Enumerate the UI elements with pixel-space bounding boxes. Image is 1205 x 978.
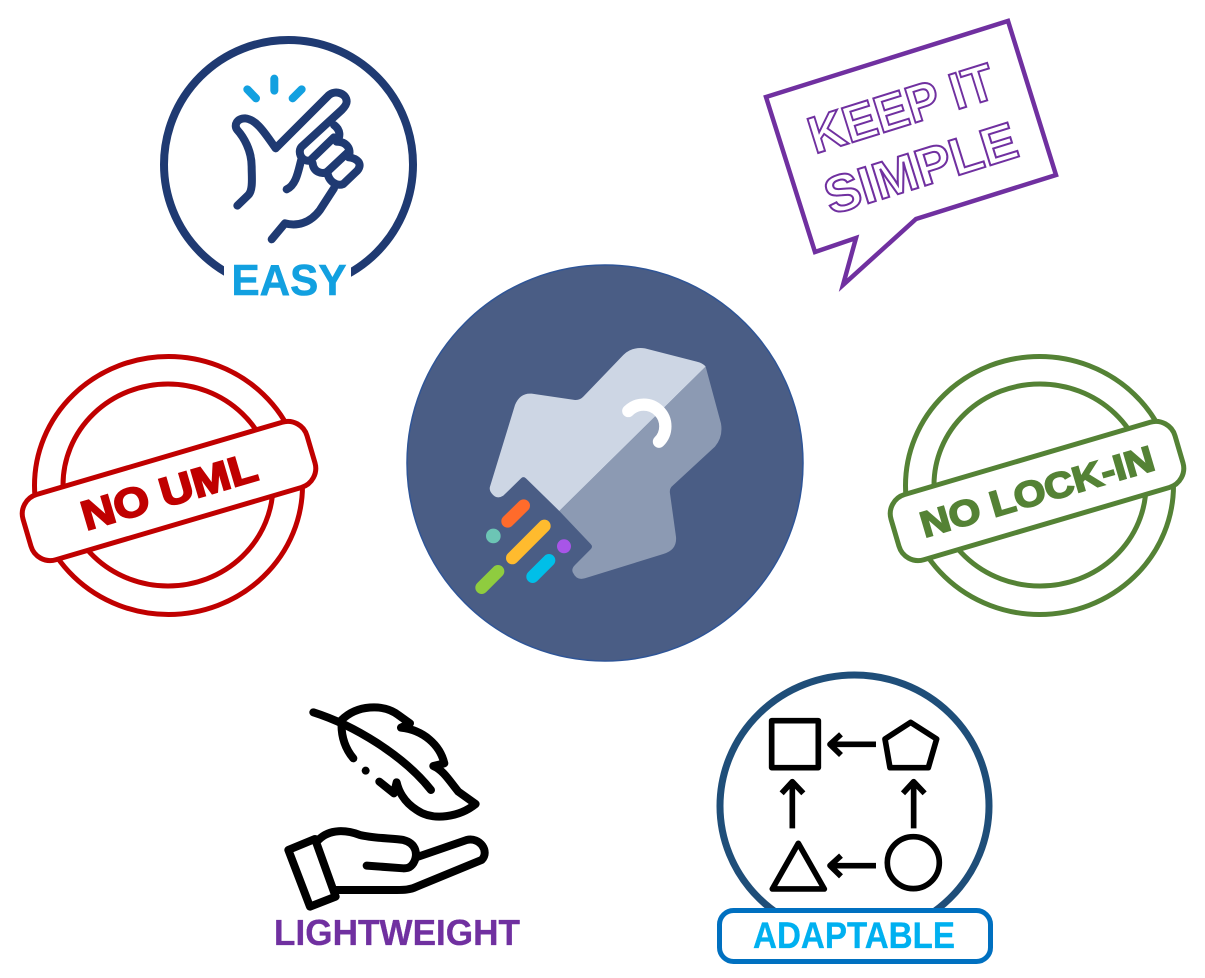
speech bubble outline: [766, 21, 1056, 285]
lightweight label: LIGHTWEIGHT: [274, 912, 520, 953]
outer ring: [34, 356, 302, 614]
panel: lightweight: [274, 707, 520, 953]
keep it text: KEEP IT: [801, 53, 1002, 165]
panel: adaptable: [720, 675, 990, 962]
icon: rocket: [482, 348, 721, 588]
easy label: EASY: [232, 256, 346, 305]
easy label backing: [224, 255, 351, 300]
banner with label: [17, 417, 321, 565]
logo disc: [407, 265, 803, 661]
icon: feather over hand: [288, 707, 485, 907]
banner with label: [885, 417, 1189, 565]
adaptable label: ADAPTABLE: [753, 915, 955, 956]
icon: finger snap hand: [236, 79, 360, 239]
adaptable ring: [720, 675, 989, 937]
easy ring: [164, 40, 413, 289]
panel: keep it simple speech bubble: [766, 21, 1056, 285]
simple text: SIMPLE: [817, 112, 1025, 226]
inner ring: [934, 384, 1146, 586]
panel: no uml stamp: [17, 356, 321, 614]
panel: central rocket logo: [407, 265, 803, 661]
banner with label: NO UML: [76, 444, 262, 539]
icon: shapes cycle: [772, 721, 939, 889]
panel: easy badge: [164, 40, 413, 305]
banner with label: NO LOCK-IN: [915, 438, 1159, 545]
adaptable label box: [720, 910, 990, 962]
outer ring: [906, 356, 1174, 614]
inner ring: [63, 384, 273, 586]
panel: no lock-in stamp: [885, 356, 1189, 614]
